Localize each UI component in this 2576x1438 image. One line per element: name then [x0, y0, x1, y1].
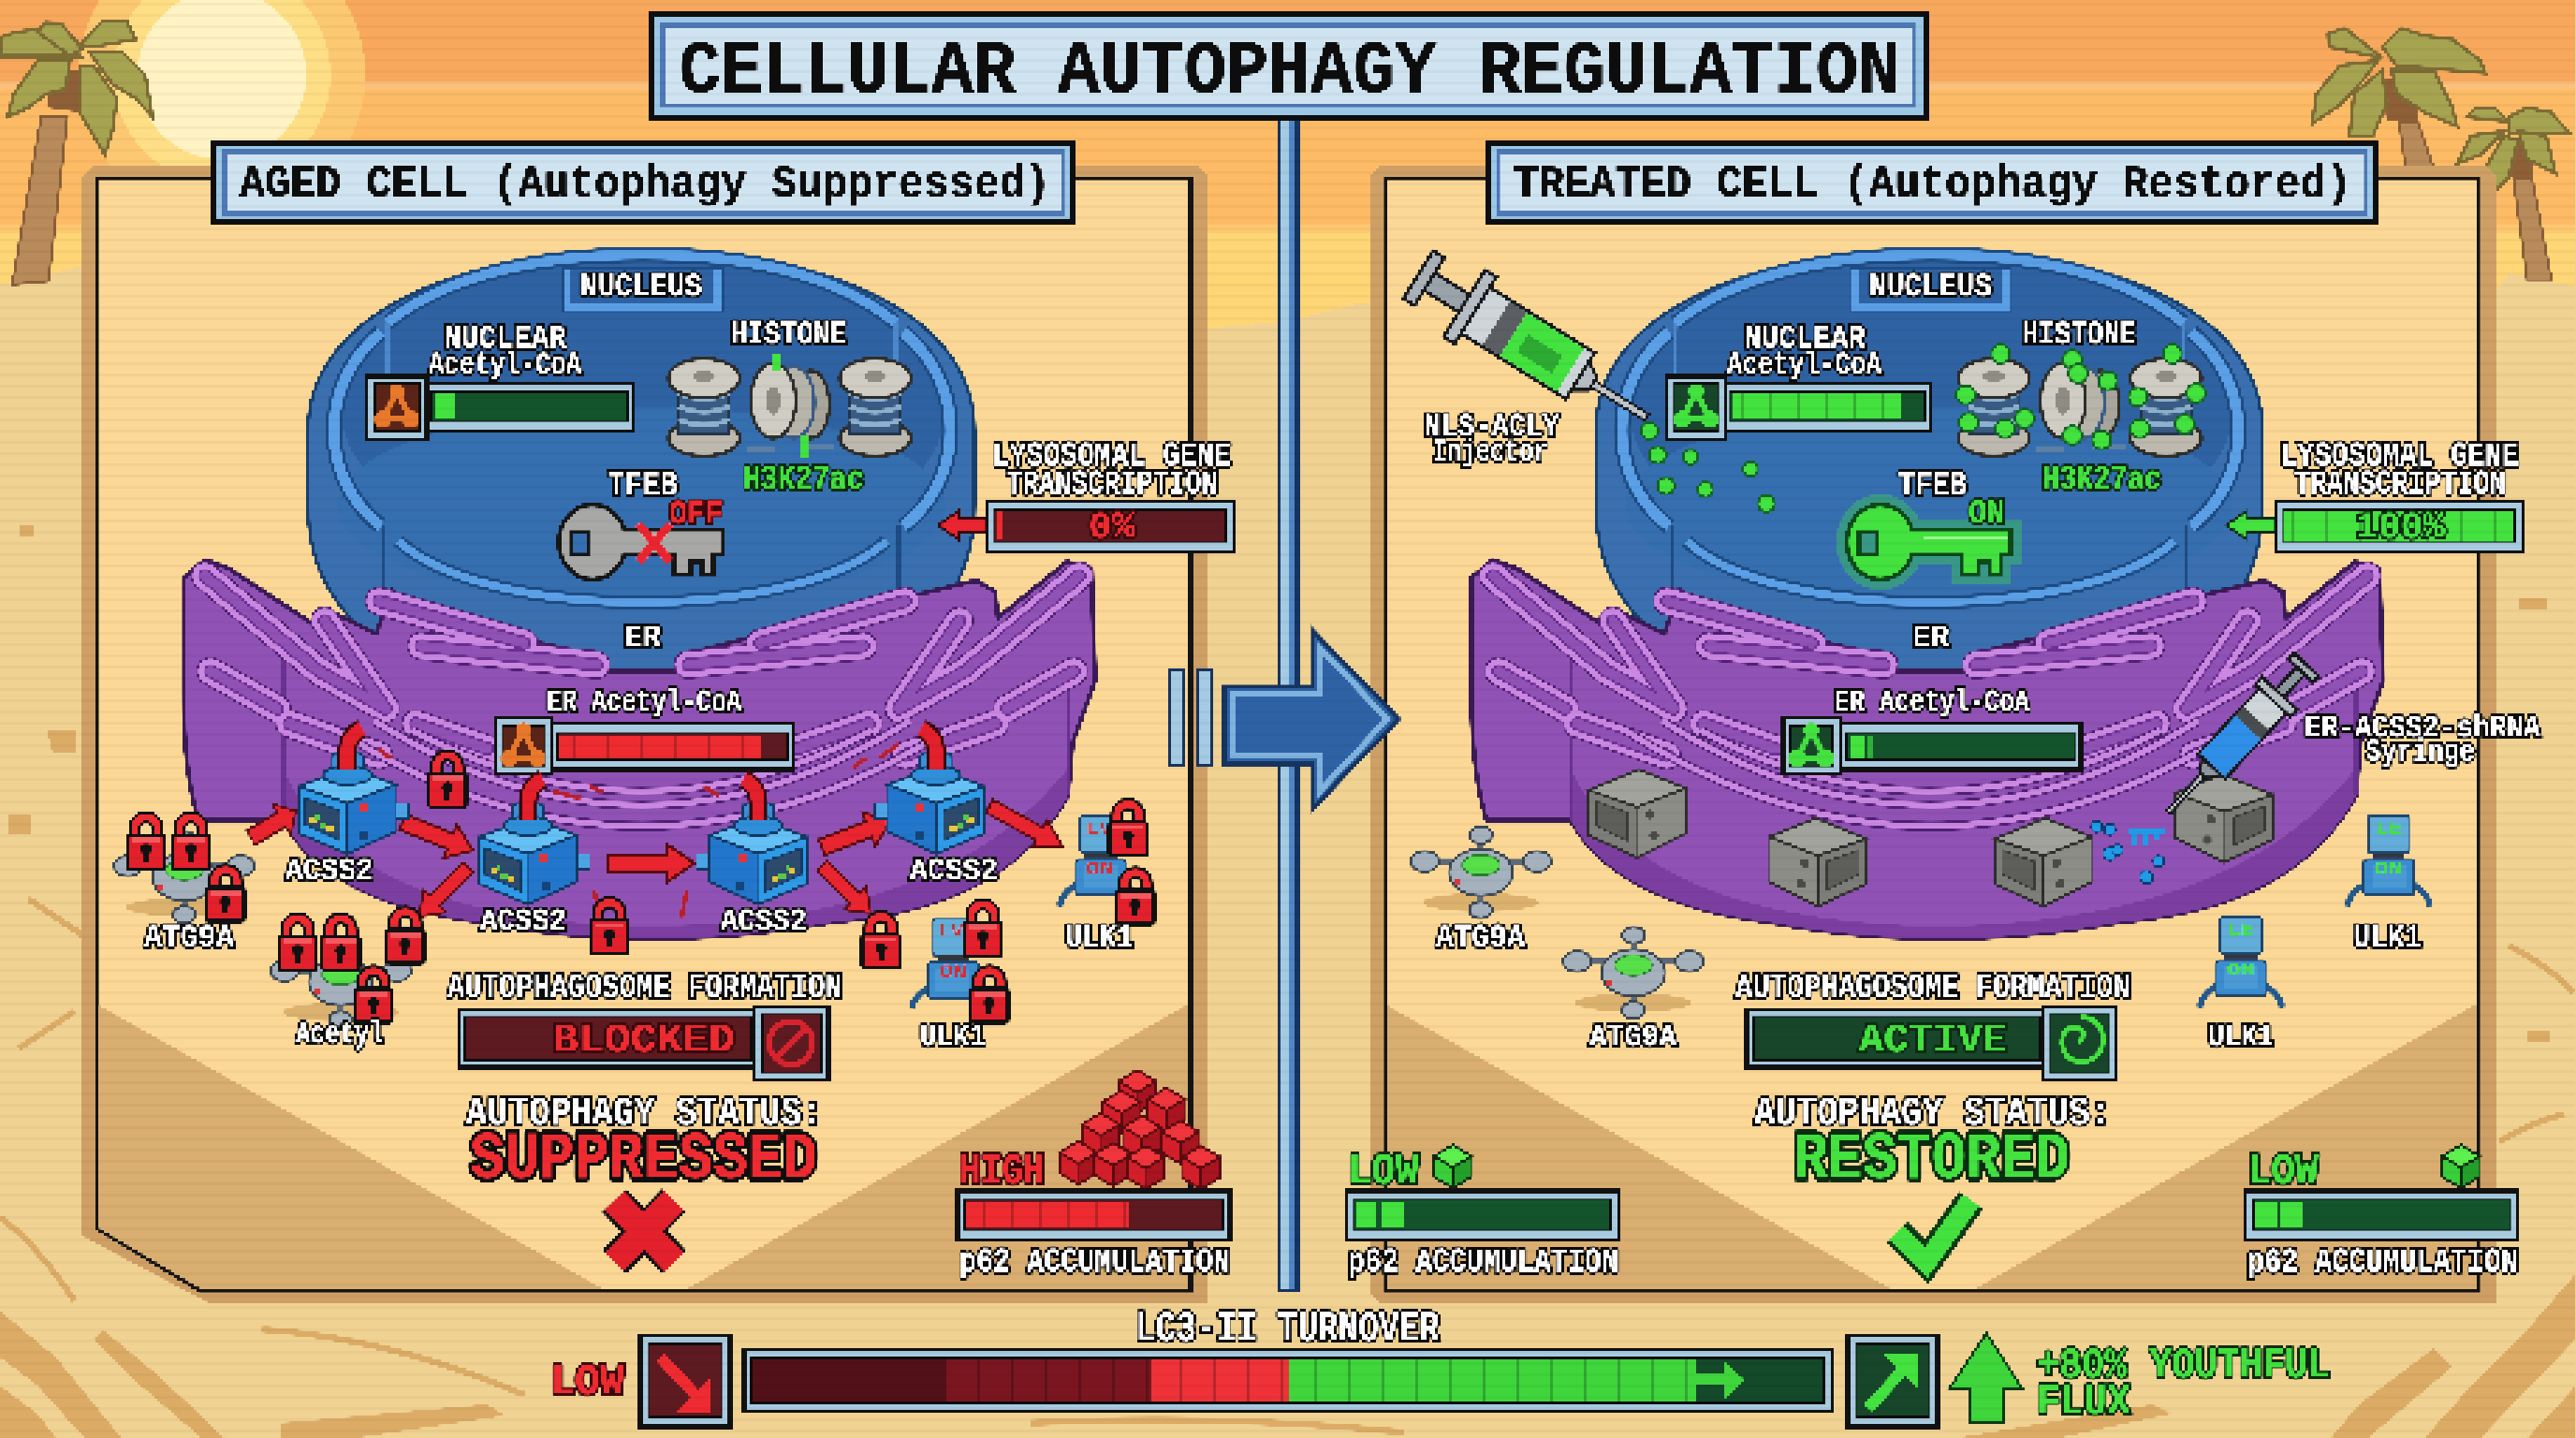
TFEB key on: ON — [1969, 495, 2005, 533]
nuclear acetyl-CoA meter: NUCLEAR — [1744, 322, 1866, 358]
autophagosome formation: blocked: BLOCKED — [552, 1018, 735, 1064]
youthful flux callout: FLUX — [2037, 1379, 2130, 1427]
histone with acetyl marks: HISTONE — [2022, 316, 2136, 354]
endoplasmic reticulum — [183, 560, 1095, 938]
ULK1 robots active: ULK1 — [2353, 921, 2422, 957]
ACSS2 machines with arrows — [242, 728, 1071, 939]
low label: LOW — [550, 1358, 625, 1408]
histone with acetyl marks — [1956, 316, 2205, 499]
p62 accumulation low, right — [2246, 1145, 2518, 1282]
nuclear acetyl-CoA meter — [367, 322, 633, 439]
lysosomal gene transcription meter — [938, 437, 1234, 551]
autophagy status: restored: AUTOPHAGY STATUS: — [1754, 1091, 2111, 1137]
TFEB key off: OFF — [669, 496, 723, 534]
palm tree right small — [2457, 108, 2569, 281]
ER acetyl-CoA meter — [1783, 685, 2081, 774]
heading: aged cell: AGED CELL (Autophagy Suppressed) — [240, 160, 1050, 211]
nucleus — [308, 251, 974, 693]
panel: treated cell — [1346, 139, 2540, 1304]
icon: youthful up arrow — [1949, 1333, 2023, 1423]
ULK1 locked upper: ULK1 — [1065, 921, 1134, 957]
p62 accumulation low, right: LOW — [2247, 1148, 2320, 1197]
icon: up arrow button — [1848, 1335, 1938, 1427]
autophagosome formation: active: ACTIVE — [1859, 1018, 2007, 1064]
nuclear acetyl-CoA meter — [1666, 322, 1930, 439]
lysosomal gene transcription meter: 100% — [2356, 507, 2446, 550]
autophagosome formation: active — [1735, 969, 2130, 1080]
ER-ACSS2-shRNA syringe: ER-ACSS2-shRNA — [2305, 712, 2540, 746]
arrow: aged to treated — [1170, 630, 1398, 809]
ER label: ER — [1912, 621, 1949, 655]
panel frame — [82, 165, 1208, 1304]
autophagosome formation: active: AUTOPHAGOSOME FORMATION — [1735, 969, 2130, 1007]
ULK1 locked upper — [1060, 804, 1154, 957]
lysosomal gene transcription meter: LYSOSOMAL GENE — [992, 437, 1231, 476]
p62 accumulation high — [958, 1070, 1230, 1282]
ULK1 robots active: ULK1 — [2208, 1020, 2274, 1056]
youthful flux callout — [2037, 1343, 2330, 1427]
sun — [79, 0, 365, 218]
TFEB key on: TFEB — [1898, 467, 1967, 505]
nuclear acetyl-CoA meter: NUCLEAR — [444, 322, 567, 358]
ULK1 robots active: ON — [2375, 859, 2403, 881]
ER-ACSS2-shRNA syringe: Syringe — [2365, 735, 2475, 770]
nucleus label: NUCLEUS — [580, 269, 702, 306]
LC3-II turnover meter — [550, 1306, 2330, 1427]
histone — [668, 316, 911, 499]
NLS-ACLY injector syringe — [1398, 242, 1775, 512]
ACSS2 machines with arrows: ACSS2 — [480, 904, 566, 939]
lysosomal gene transcription meter: TRANSCRIPTION — [2294, 465, 2506, 504]
ULK1 locked lower: LV — [939, 923, 963, 942]
sky — [0, 0, 2576, 337]
autophagosome formation: blocked: AUTOPHAGOSOME FORMATION — [447, 969, 842, 1007]
ULK1 robots active — [2200, 815, 2430, 1056]
Acetyl robot locked — [271, 912, 424, 1053]
Acetyl robot locked: Acetyl — [296, 1018, 384, 1053]
autophagosome formation: blocked — [447, 969, 842, 1080]
centre divider — [1277, 120, 1299, 1292]
histone: HISTONE — [731, 316, 846, 354]
ATG9A robots active: ATG9A — [1589, 1020, 1677, 1056]
inactive ACSS2 boxes — [1588, 770, 2273, 906]
ER acetyl-CoA meter — [495, 685, 793, 774]
lysosomal gene transcription meter: LYSOSOMAL GENE — [2280, 437, 2519, 476]
TFEB key on — [1847, 467, 2011, 580]
autophagy status: suppressed: AUTOPHAGY STATUS: — [466, 1091, 823, 1137]
lysosomal gene transcription meter — [2226, 437, 2523, 551]
ER acetyl-CoA meter: ER Acetyl-CoA — [547, 685, 741, 720]
icon: down arrow button — [640, 1335, 730, 1427]
p62 accumulation low, left — [1346, 1145, 1618, 1282]
heading: treated cell: TREATED CELL (Autophagy Restored) — [1514, 160, 2351, 211]
ATG9A locked — [114, 817, 255, 957]
ULK1 robots active: LE — [2376, 820, 2402, 839]
p62 accumulation low, left: p62 ACCUMULATION — [1348, 1243, 1618, 1282]
p62 accumulation high: p62 ACCUMULATION — [959, 1243, 1230, 1282]
ULK1 locked upper: ON — [1086, 859, 1114, 881]
ULK1 robots active: ON — [2227, 961, 2255, 982]
p62 accumulation high: HIGH — [959, 1148, 1045, 1197]
ATG9A robots active — [1411, 827, 1704, 1056]
title: CELLULAR AUTOPHAGY REGULATION — [679, 30, 1900, 115]
nucleus — [1596, 251, 2262, 693]
lysosomal gene transcription meter: TRANSCRIPTION — [1006, 465, 1218, 504]
ACSS2 machines with arrows: ACSS2 — [285, 854, 373, 888]
endoplasmic reticulum — [1471, 560, 2383, 938]
TFEB key off: TFEB — [607, 467, 678, 505]
standalone locks — [429, 756, 900, 968]
autophagy status: restored — [1754, 1091, 2111, 1262]
ER-ACSS2-shRNA syringe — [2091, 649, 2540, 884]
p62 accumulation low, right: p62 ACCUMULATION — [2247, 1243, 2518, 1282]
ULK1 locked lower — [912, 904, 1008, 1056]
LC3-II turnover meter: LC3-II TURNOVER — [1135, 1306, 1440, 1354]
nuclear acetyl-CoA meter: Acetyl-CoA — [1727, 348, 1881, 384]
ATG9A locked: ATG9A — [144, 921, 235, 957]
TFEB key off — [559, 467, 723, 580]
nucleus label: NUCLEUS — [1869, 269, 1992, 306]
ULK1 robots active: LE — [2228, 921, 2254, 940]
panel: aged cell — [82, 139, 1234, 1304]
histone with acetyl marks: H3K27ac — [2042, 461, 2161, 499]
ER label: ER — [624, 621, 661, 655]
ULK1 locked lower: ON — [939, 962, 967, 984]
p62 accumulation low, left: LOW — [1348, 1148, 1420, 1197]
ER acetyl-CoA meter: ER Acetyl-CoA — [1835, 685, 2029, 720]
heading: treated cell — [1486, 139, 2378, 226]
turnover bar — [744, 1350, 1832, 1412]
palm tree right large — [2312, 28, 2485, 169]
ATG9A robots active: ATG9A — [1436, 921, 1526, 957]
heading: aged cell — [212, 139, 1076, 226]
ULK1 locked upper: LV — [1086, 820, 1112, 839]
NLS-ACLY injector syringe: NLS-ACLY — [1424, 410, 1560, 446]
panel frame — [1370, 165, 2496, 1304]
ACSS2 machines with arrows: ACSS2 — [721, 904, 807, 939]
autophagy status: suppressed — [466, 1091, 823, 1262]
autophagy status: restored: RESTORED — [1793, 1123, 2070, 1198]
palm tree left — [0, 21, 153, 285]
lysosomal gene transcription meter: 0% — [1089, 507, 1136, 550]
histone: H3K27ac — [743, 461, 864, 499]
autophagy status: suppressed: SUPPRESSED — [470, 1123, 817, 1198]
ULK1 locked lower: ULK1 — [920, 1020, 986, 1056]
youthful flux callout: +80% YOUTHFUL — [2037, 1343, 2330, 1390]
nuclear acetyl-CoA meter: Acetyl-CoA — [429, 348, 581, 384]
ACSS2 machines with arrows: ACSS2 — [910, 854, 998, 888]
NLS-ACLY injector syringe: Injector — [1432, 435, 1548, 471]
